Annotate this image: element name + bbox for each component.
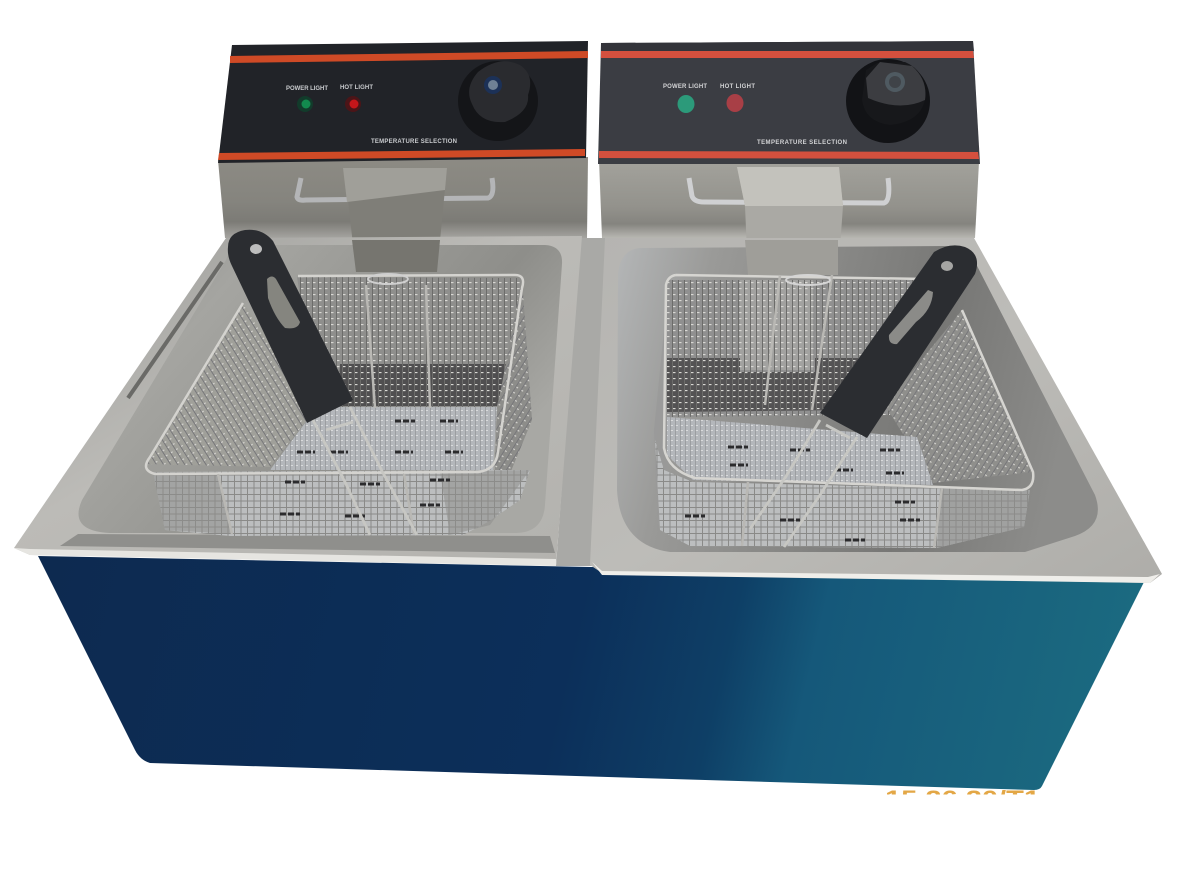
- handle wires: [313, 407, 417, 535]
- hook plate highlight: [737, 167, 843, 206]
- basket centre hook: [218, 285, 430, 534]
- temperature knob: [458, 61, 538, 141]
- black basket handle: [228, 230, 353, 423]
- basket: [146, 274, 532, 536]
- right wall: [493, 278, 532, 515]
- red stripes: [599, 51, 979, 159]
- hook ring: [786, 275, 830, 285]
- handle wires: [750, 420, 857, 547]
- hot light label: HOT LIGHT: [340, 85, 373, 91]
- back wall centre panel: [740, 280, 813, 370]
- well: [617, 246, 1098, 552]
- top dark band: [601, 41, 974, 51]
- basket floor: [667, 417, 933, 485]
- blue fryer body: [38, 556, 1146, 790]
- well: [78, 245, 562, 533]
- green lamp: [678, 95, 694, 113]
- hot light label: HOT LIGHT: [720, 84, 755, 90]
- front handle: [297, 178, 493, 200]
- black basket handle: [820, 245, 977, 438]
- back wall tone: [667, 280, 925, 417]
- back wall mesh: [297, 277, 522, 410]
- left wall: [146, 303, 317, 467]
- rim dark stripe: [128, 262, 222, 398]
- basket floor: [270, 407, 497, 470]
- back wall dark band: [338, 364, 507, 406]
- rim: [14, 236, 582, 564]
- handle hole: [250, 244, 262, 254]
- handle slot: [267, 276, 300, 328]
- back wall tone: [297, 277, 522, 410]
- hook ring: [368, 274, 408, 284]
- right fry pot: [590, 238, 1162, 583]
- left control box: [218, 41, 588, 272]
- basket: [654, 275, 1033, 548]
- basket rim wire: [664, 275, 1033, 490]
- hook plate highlight: [343, 168, 447, 202]
- front wall outer panels: [153, 470, 530, 535]
- control panel: [218, 41, 588, 163]
- hook plate over well: [352, 240, 440, 272]
- temperature knob: [846, 59, 930, 143]
- red lamp: [726, 94, 744, 112]
- centre divider strip: [556, 238, 607, 566]
- floor slots: [280, 421, 463, 516]
- left wall: [654, 330, 668, 530]
- temperature label: TEMPERATURE SELECTION: [757, 140, 847, 146]
- rim front highlight: [14, 548, 556, 566]
- front wall: [153, 470, 530, 536]
- basket hook plate: [343, 168, 447, 272]
- right wall: [885, 310, 1033, 483]
- front wall: [655, 440, 1030, 548]
- rim front highlight: [592, 562, 1160, 583]
- handle hole: [941, 261, 953, 271]
- rim: [590, 238, 1162, 583]
- right control box: [598, 41, 980, 275]
- back wall dark band: [667, 358, 860, 412]
- steel back plate: [218, 157, 588, 238]
- power light label: POWER LIGHT: [286, 86, 328, 92]
- front handle: [689, 178, 889, 203]
- control panel: [598, 41, 980, 164]
- handle slot: [889, 290, 933, 344]
- temperature label: TEMPERATURE SELECTION: [371, 139, 457, 145]
- hook plate over well: [745, 240, 838, 275]
- green lamp: [297, 96, 313, 112]
- steel back plate: [599, 160, 979, 238]
- floor slots: [685, 447, 920, 540]
- red stripes: [218, 51, 588, 160]
- basket centre hook: [742, 275, 942, 548]
- basket hook plate: [737, 167, 843, 275]
- timestamp fragment: 15 26 20/T1: [885, 786, 1040, 811]
- left fry pot: [14, 230, 582, 566]
- power light label: POWER LIGHT: [663, 84, 707, 90]
- front wall right panel: [937, 488, 1030, 548]
- rim front shadow: [60, 534, 555, 553]
- back wall mesh: [667, 280, 925, 417]
- basket rim wire: [146, 275, 523, 474]
- red lamp: [345, 96, 361, 112]
